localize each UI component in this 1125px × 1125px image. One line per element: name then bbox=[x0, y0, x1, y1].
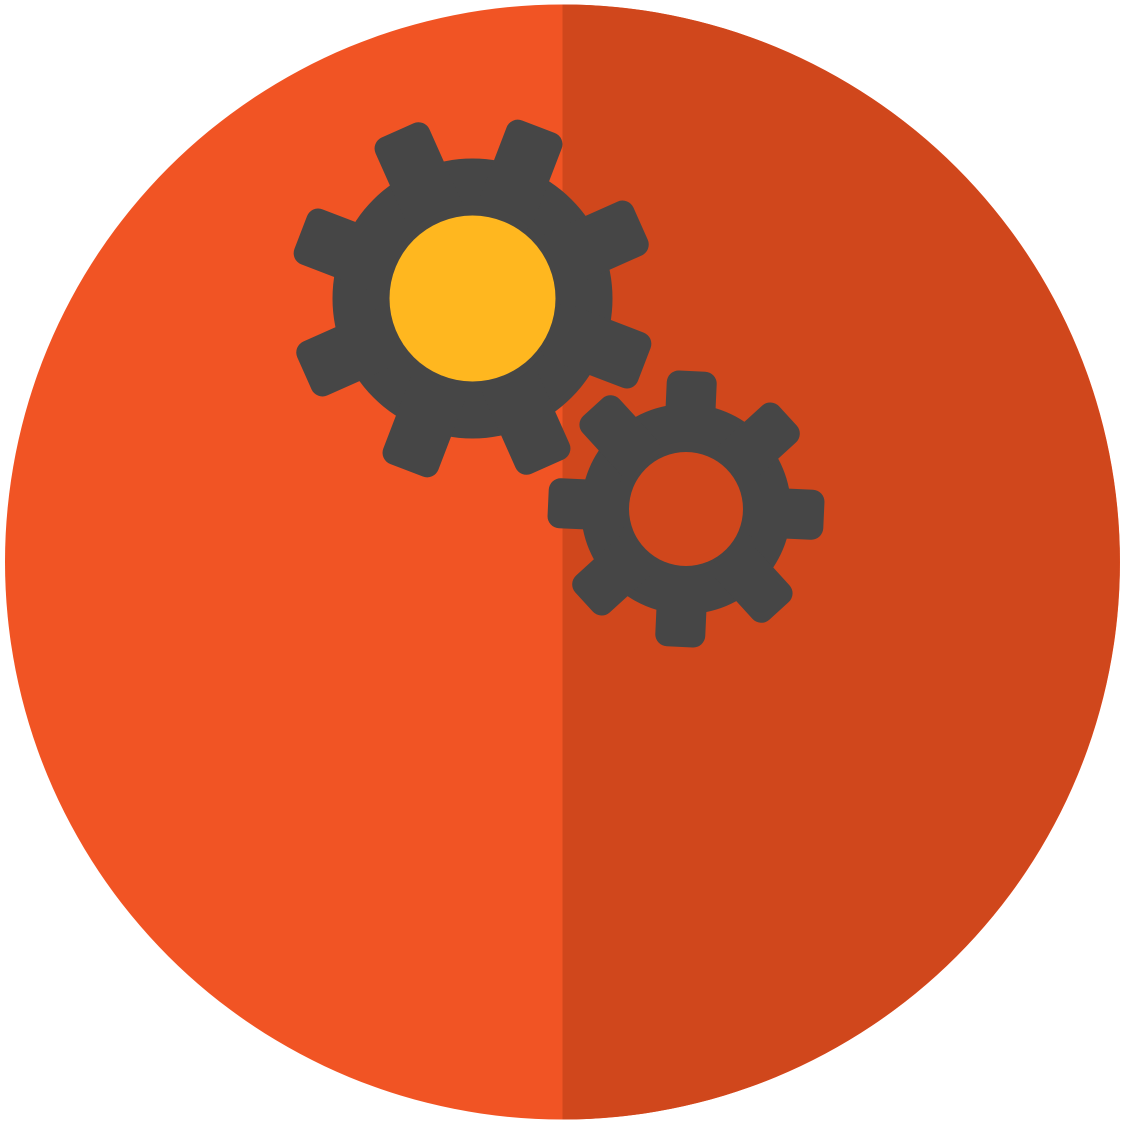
icon: large gear bbox=[290, 116, 655, 481]
icon: small gear bbox=[547, 370, 825, 648]
